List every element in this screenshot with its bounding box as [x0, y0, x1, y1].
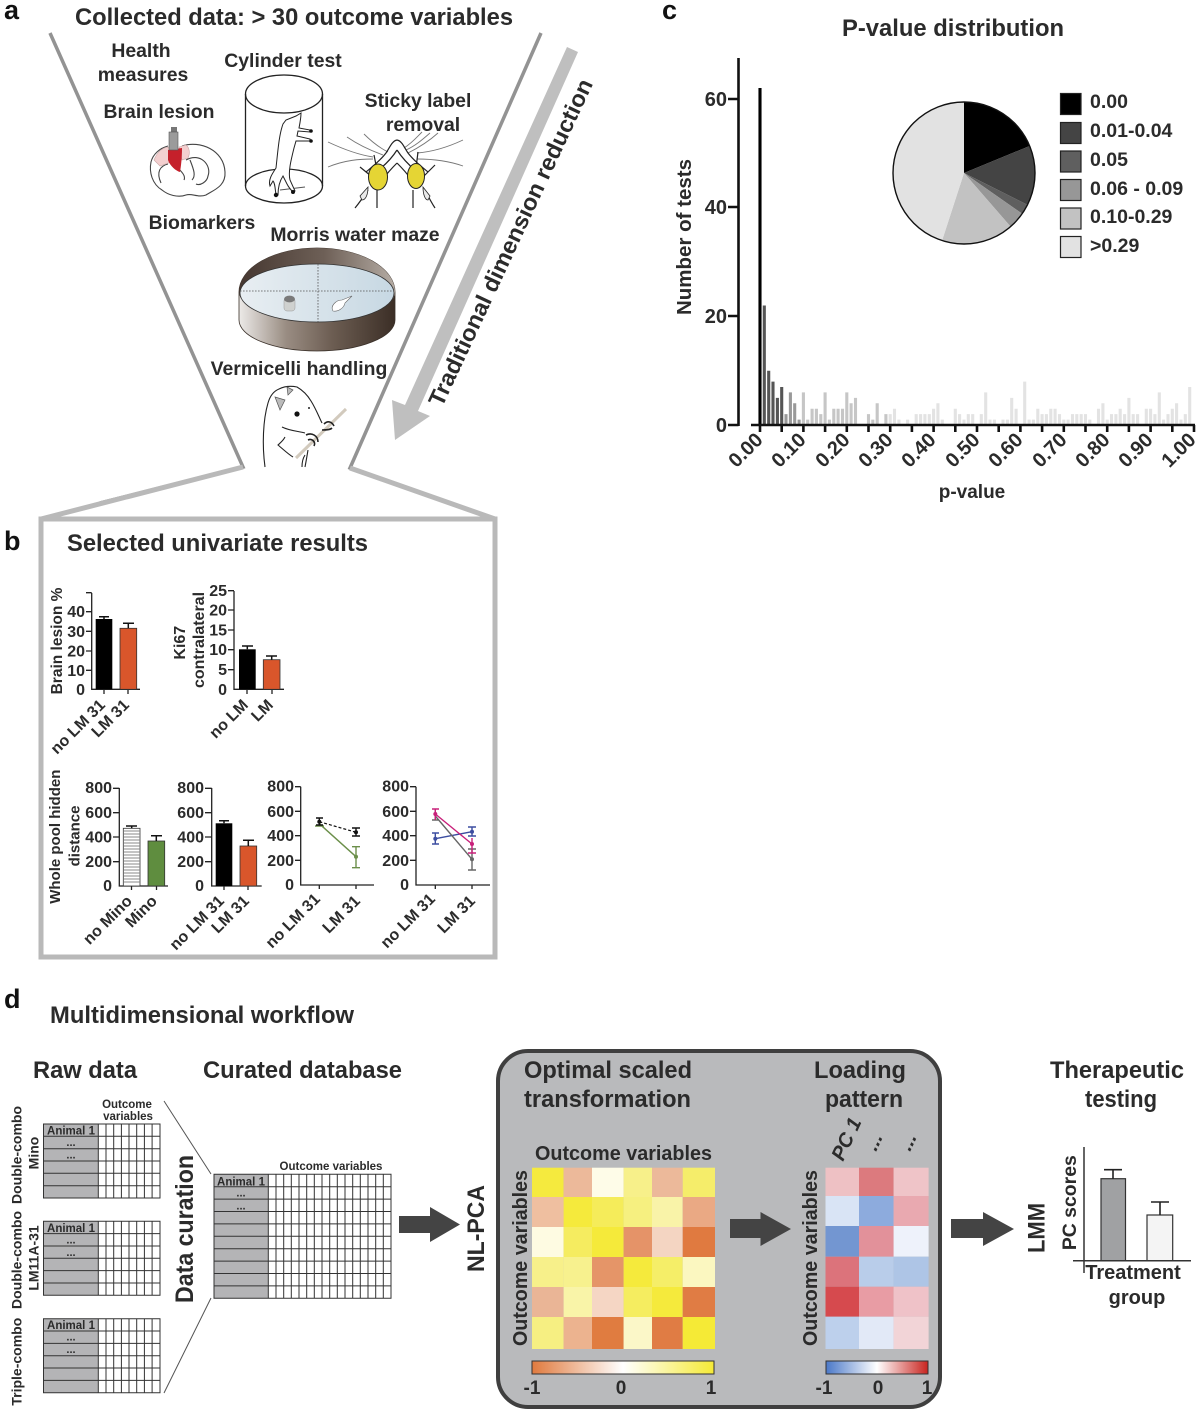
table side labels: Triple-combo: [9, 1318, 25, 1406]
bar chart: whole pool hidden distance, LM 31: 0: [195, 878, 204, 895]
arrow: traditional dimension reduction: [392, 47, 578, 440]
y axis tick labels: 20: [705, 306, 727, 328]
label: NL-PCA: NL-PCA: [463, 1185, 490, 1272]
bar chart: whole pool hidden distance, minocycline: Whole pool hidden: [47, 770, 64, 904]
label: outcome variables curated: Outcome variables: [280, 1161, 382, 1173]
heading: curated database: Curated database: [203, 1057, 402, 1084]
colour bar: loading scale: 1: [922, 1378, 933, 1399]
label: outcome variables for raw tables: Outcome: [102, 1099, 152, 1111]
heading: p-value distribution: P-value distribution: [842, 15, 1064, 42]
line chart: LM 31 by minocycline: LM 31: [320, 893, 364, 937]
heading: optimal scaled transformation: transformation: [524, 1086, 691, 1113]
table: double-combo LM11A-31: ...: [66, 1247, 76, 1259]
table: curated database: ...: [236, 1187, 246, 1199]
heading: loading pattern: pattern: [825, 1086, 903, 1113]
box outline: [41, 467, 495, 957]
table: double-combo LM11A-31: [44, 1221, 160, 1295]
line chart: LM 31 by combination: LM 31: [435, 893, 479, 937]
label: outcome variables left: Outcome variables: [510, 1170, 532, 1346]
table: triple-combo: ...: [66, 1344, 76, 1356]
label: PC 1: PC 1: [828, 1115, 866, 1164]
table side labels: LM11A-31: [25, 1225, 41, 1291]
line chart: LM 31 by minocycline: 400: [267, 828, 294, 845]
arrow label: Traditional dimension reduction: [423, 75, 598, 410]
x axis tick labels: 0.20: [811, 429, 855, 472]
heading: therapeutic testing: [1050, 1057, 1184, 1113]
bar chart: PC scores by treatment group: Treatment: [1085, 1262, 1181, 1284]
heading: collected data: Collected data: > 30 outcome variables: [75, 4, 513, 31]
bar chart: PC scores by treatment group: group: [1109, 1287, 1165, 1309]
bar chart: whole pool hidden distance, minocycline: Mino: [122, 893, 161, 931]
heatmap: loading pattern: [826, 1168, 929, 1349]
bar chart: whole pool hidden distance, LM 31: 400: [177, 830, 204, 846]
table: curated database: Animal 1: [217, 1176, 266, 1188]
line chart: LM 31 by minocycline: 200: [267, 853, 294, 870]
y axis tick labels: 60: [705, 89, 727, 111]
label: further PCs: [861, 1130, 922, 1154]
bar chart: whole pool hidden distance, minocycline: 0: [103, 878, 112, 895]
line chart: LM 31 by combination: 400: [382, 828, 409, 845]
legend: 0.06 - 0.09: [1090, 178, 1183, 200]
y axis title: Number of tests: [673, 159, 696, 315]
table side labels: Double-combo: [9, 1106, 25, 1204]
bar chart: whole pool hidden distance, minocycline: 400: [85, 830, 112, 846]
bar chart: brain lesion: 20: [67, 644, 85, 660]
table: double-combo LM11A-31: ...: [66, 1234, 76, 1246]
line chart: LM 31 by combination: 0: [400, 877, 409, 894]
heading: loading pattern: Loading: [814, 1057, 906, 1084]
bar chart: Ki67 contralateral: 15: [209, 622, 227, 640]
histogram bars: [760, 88, 1190, 425]
bar chart: Ki67 contralateral: 10: [209, 642, 227, 659]
legend: >0.29: [1090, 235, 1139, 257]
x axis tick labels: 0.30: [854, 429, 898, 472]
bar chart: brain lesion: 0: [76, 682, 85, 699]
line chart: LM 31 by minocycline: 0: [285, 877, 294, 894]
label: further PCs: ...: [861, 1130, 888, 1154]
bar chart: Ki67 contralateral: LM: [248, 697, 277, 725]
icon: morris water maze pool: [239, 248, 395, 351]
label: data curation: Data curation: [171, 1155, 199, 1303]
bar chart: Ki67 contralateral: 25: [209, 583, 227, 600]
table: triple-combo: [44, 1319, 160, 1393]
bar chart: brain lesion: LM 31: [89, 697, 133, 741]
bar chart: whole pool hidden distance, minocycline: 800: [85, 780, 112, 797]
panel: a collected data funnel: [4, 0, 598, 510]
label: health measures: [98, 40, 188, 86]
legend: [1060, 91, 1183, 258]
bar chart: whole pool hidden distance, LM 31: LM 31: [209, 893, 253, 937]
x axis tick labels: 1.00: [1157, 429, 1200, 472]
bar chart: brain lesion: 40: [67, 604, 85, 621]
label: health measures: measures: [98, 64, 188, 86]
heading: optimal scaled transformation: Optimal scaled: [524, 1057, 692, 1084]
colour bar: transformation scale: [524, 1361, 717, 1399]
bar chart: PC scores by treatment group: PC scores: [1060, 1155, 1081, 1250]
bar chart: whole pool hidden distance, minocycline: 600: [85, 805, 112, 822]
panel: c p-value distribution: [662, 0, 1200, 503]
panel letter d: d: [4, 984, 20, 1014]
icon: mouse with sticky labels: [328, 132, 463, 208]
label: outcome variables for raw tables: variables: [103, 1111, 153, 1123]
heading: loading pattern: [814, 1057, 906, 1113]
x axis tick labels: [724, 429, 1200, 472]
bar chart: Ki67 contralateral: contralateral: [191, 592, 208, 688]
label: sticky label removal: removal: [386, 114, 460, 136]
colour bar: loading scale: [816, 1361, 933, 1399]
bar chart: whole pool hidden distance, minocycline: distance: [66, 806, 83, 866]
bar chart: whole pool hidden distance, LM 31: 200: [177, 854, 204, 871]
label: sticky label removal: [365, 90, 471, 136]
colour bar: transformation scale: -1: [524, 1378, 541, 1399]
colour bar: transformation scale: 0: [616, 1378, 626, 1399]
y axis tick labels: [705, 89, 727, 437]
table side labels: Mino: [25, 1137, 41, 1169]
arrow: database to NL-PCA: [399, 1207, 460, 1242]
panel: b selected univariate results: [4, 467, 495, 957]
bar chart: whole pool hidden distance, minocycline: no Mino: [80, 893, 136, 948]
label: further PCs: ...: [895, 1130, 922, 1154]
bar chart: brain lesion: [48, 587, 140, 758]
bar chart: Ki67 contralateral: 5: [218, 662, 227, 679]
table: triple-combo: ...: [66, 1332, 76, 1344]
bar chart: whole pool hidden distance, minocycline: 200: [85, 854, 112, 871]
table: double-combo mino: ...: [66, 1150, 76, 1162]
bar chart: brain lesion: no LM 31: [48, 697, 109, 758]
legend: 0.00: [1090, 91, 1128, 113]
label: vermicelli handling: Vermicelli handling: [211, 358, 387, 380]
heading: multidimensional workflow: Multidimensional workflow: [50, 1002, 354, 1029]
bar chart: Ki67 contralateral: 20: [209, 602, 227, 620]
table: curated database: [214, 1174, 391, 1298]
line chart: LM 31 by combination: [378, 778, 490, 952]
funnel outline: [50, 33, 541, 510]
bar chart: brain lesion: Brain lesion %: [49, 587, 66, 694]
icon: cylinder test with rat: [246, 75, 322, 203]
colour bar: loading scale: 0: [873, 1378, 883, 1399]
line chart: LM 31 by minocycline: no LM 31: [263, 891, 324, 952]
x axis title: p-value: [939, 482, 1005, 503]
panel letter b: b: [4, 526, 20, 556]
table side labels: [9, 1106, 41, 1406]
x axis tick labels: 0.60: [984, 429, 1028, 472]
bar chart: whole pool hidden distance, LM 31: [167, 780, 262, 954]
table: double-combo mino: Animal 1: [47, 1126, 96, 1138]
y axis tick labels: 40: [705, 197, 727, 219]
line chart: LM 31 by minocycline: 800: [267, 778, 294, 796]
panel: d multidimensional workflow: [4, 984, 1191, 1407]
colour bar: transformation scale: 1: [706, 1378, 717, 1399]
x axis tick labels: 0.00: [724, 429, 768, 472]
heading: therapeutic testing: testing: [1085, 1086, 1157, 1113]
panel: NL-PCA grey box: [498, 1051, 940, 1407]
bar chart: whole pool hidden distance, LM 31: 800: [177, 780, 204, 797]
label: outcome variables for raw tables: [102, 1099, 153, 1123]
label: LMM: LMM: [1024, 1203, 1050, 1253]
bar chart: whole pool hidden distance, LM 31: no LM 31: [167, 893, 228, 954]
arrow: loading to LMM: [951, 1212, 1014, 1246]
table side labels: Double-combo: [9, 1211, 25, 1309]
label: morris water maze: Morris water maze: [270, 224, 440, 246]
bar chart: brain lesion: 30: [67, 624, 85, 641]
table: double-combo mino: [44, 1124, 160, 1198]
heading: therapeutic testing: Therapeutic: [1050, 1057, 1184, 1084]
label: outcome variables loading left: Outcome variables: [800, 1170, 822, 1346]
icon: brain section with lesion: [150, 127, 225, 196]
table: triple-combo: Animal 1: [47, 1320, 96, 1332]
bar chart: PC scores by treatment group: [1060, 1147, 1191, 1309]
x axis tick labels: 0.50: [941, 429, 985, 472]
label: biomarkers: Biomarkers: [149, 212, 255, 234]
bar chart: Ki67 contralateral: no LM: [207, 697, 252, 742]
table: double-combo LM11A-31: Animal 1: [47, 1223, 96, 1235]
legend: 0.10-0.29: [1090, 206, 1173, 228]
line chart: LM 31 by combination: 800: [382, 778, 409, 796]
bar chart: whole pool hidden distance, minocycline: [47, 770, 168, 948]
line chart: LM 31 by combination: no LM 31: [378, 891, 439, 952]
heatmap: optimal scaled transformation: [532, 1168, 715, 1349]
bar chart: Ki67 contralateral: 0: [218, 682, 227, 699]
label: brain lesion: Brain lesion: [104, 101, 214, 123]
heading: raw data: Raw data: [33, 1057, 138, 1084]
line chart: LM 31 by combination: 600: [382, 804, 409, 821]
legend: 0.01-0.04: [1090, 120, 1173, 142]
x axis tick labels: 0.70: [1028, 429, 1072, 472]
label: health measures: Health: [111, 40, 171, 62]
histogram axes: [728, 58, 1195, 432]
table: curated database: ...: [236, 1200, 246, 1212]
x axis tick labels: 0.10: [767, 429, 811, 472]
line chart: LM 31 by minocycline: 600: [267, 804, 294, 821]
pie chart: [893, 102, 1035, 244]
x axis tick labels: 0.90: [1114, 429, 1158, 472]
bar chart: Ki67 contralateral: [172, 583, 284, 742]
x axis tick labels: 0.80: [1071, 429, 1115, 472]
line chart: LM 31 by combination: 200: [382, 853, 409, 870]
icon: mouse handling vermicelli: [263, 386, 346, 467]
bar chart: brain lesion: 10: [67, 663, 85, 680]
legend: 0.05: [1090, 149, 1128, 171]
bar chart: whole pool hidden distance, LM 31: 600: [177, 805, 204, 822]
line chart: LM 31 by minocycline: [263, 778, 374, 952]
y axis tick labels: 0: [716, 415, 727, 437]
table: double-combo mino: ...: [66, 1137, 76, 1149]
data curation bracket lines: [164, 1101, 211, 1393]
heading: selected univariate results: Selected univariate results: [67, 530, 368, 557]
arrow: transformation to loading: [730, 1212, 791, 1246]
label: cylinder test: Cylinder test: [224, 50, 342, 72]
bar chart: Ki67 contralateral: Ki67: [172, 626, 189, 660]
colour bar: loading scale: -1: [816, 1378, 833, 1399]
label: sticky label removal: Sticky label: [365, 90, 471, 112]
heading: optimal scaled transformation: [524, 1057, 692, 1113]
label: outcome variables top: Outcome variables: [535, 1143, 712, 1165]
x axis tick labels: 0.40: [897, 429, 941, 472]
